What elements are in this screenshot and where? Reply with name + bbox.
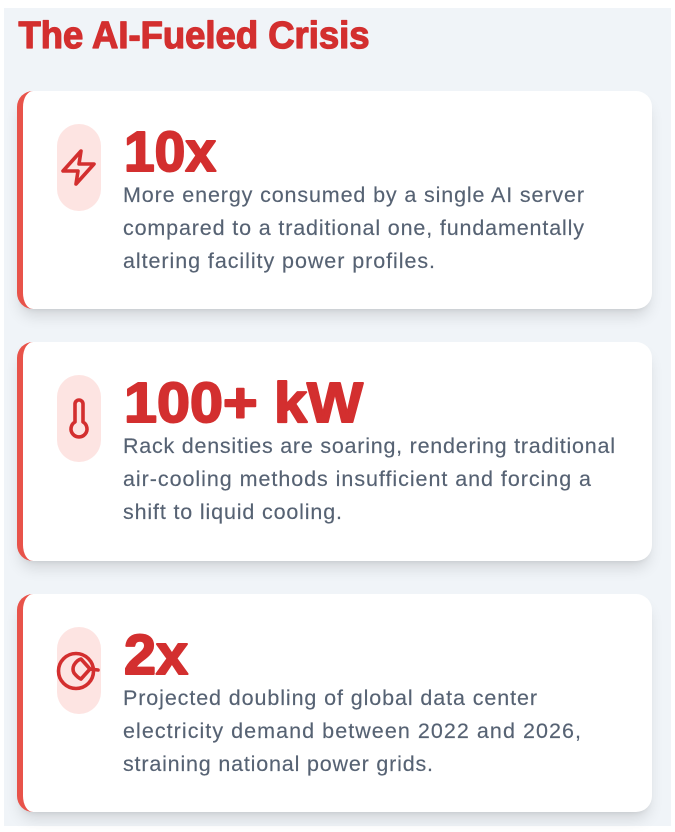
text: energy description: compared to a traditional one, fundamentally [123, 216, 584, 240]
text: demand description: electricity demand between 2022 and 2026, [123, 719, 581, 743]
stat: 2x: 2x [124, 623, 188, 687]
text: density description: shift to liquid cooling. [123, 500, 342, 524]
card: 2x demand [17, 594, 652, 812]
text: density description: air-cooling methods insufficient and forcing a [123, 467, 591, 491]
text: energy description: altering facility power profiles. [123, 249, 435, 273]
icon background: thermometer [57, 375, 101, 462]
card: 100+ kW density [17, 342, 652, 561]
stat: 10x: 10x [124, 120, 216, 184]
title: The AI-Fueled Crisis [18, 15, 370, 57]
text: density description: Rack densities are soaring, rendering traditional [123, 434, 615, 458]
icon background: lightning [57, 124, 101, 211]
text: demand description: Projected doubling of global data center [123, 686, 537, 710]
text: demand description: straining national power grids. [123, 752, 433, 776]
icon background: grid [57, 627, 101, 714]
card: 10x energy [17, 91, 652, 309]
text: energy description: More energy consumed by a single AI server [123, 183, 584, 207]
stat: 100+ kW: 100+ kW [124, 371, 363, 435]
